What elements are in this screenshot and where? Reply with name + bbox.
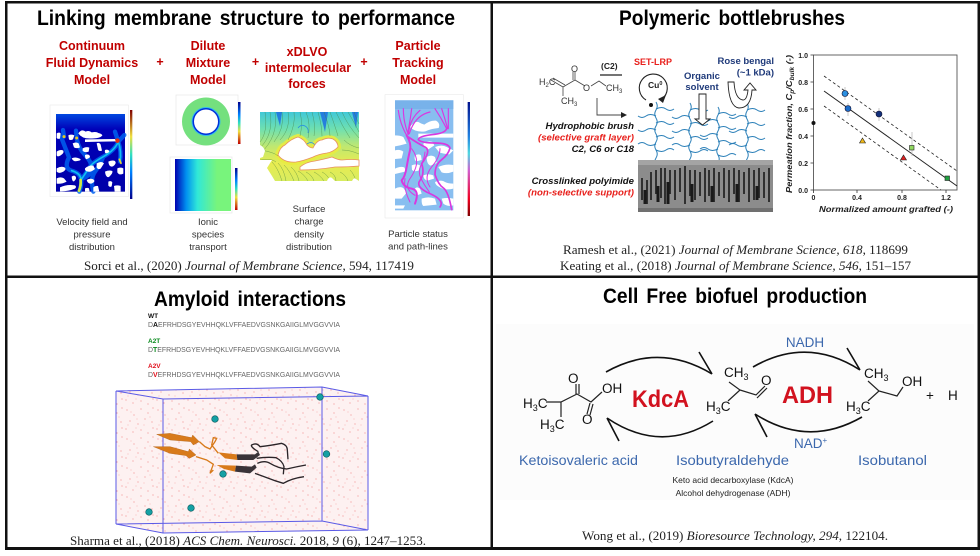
molecule: ketoisovaleric acid: OH [602, 381, 622, 396]
caption: surface charge: density [294, 229, 324, 240]
label: hydrophobic brush: C2, C6 or C18 [572, 144, 635, 155]
diagram: reaction pathway [519, 335, 958, 498]
molecule: isobutanol [846, 366, 922, 416]
heading: dilute mixture model: Dilute [191, 39, 225, 53]
molecule: ketoisovaleric acid: H [540, 417, 550, 432]
label: ketoisovaleric acid: Ketoisovaleric acid [519, 453, 638, 468]
diagram: monomer structure: C [549, 77, 556, 87]
heading: dilute mixture model: Mixture [186, 56, 230, 70]
panel: amyloid interactions [70, 288, 426, 548]
pore: strip [300, 157, 359, 170]
chart: permeation fraction vs normalized amount grafted: 0.8 [897, 195, 907, 202]
plus sign: + [252, 55, 259, 69]
chart: ionic species transport [170, 157, 238, 213]
label: rose bengal: Rose bengal [718, 56, 774, 67]
title: linking membrane structure: Linking membrane structure to performance [37, 7, 455, 30]
diagram: monomer structure [539, 61, 627, 118]
label: organic solvent: Organic [684, 71, 720, 82]
molecule: isobutanol: 3 [856, 406, 861, 416]
citation: Ramesh and Keating: Ramesh et al., (2021) Journal of Membrane Science, 618 , 118699 [563, 243, 908, 257]
pore: main blob [278, 137, 338, 162]
diagram: hydrophobic brush layer [638, 102, 765, 171]
citation: Sorci: Sorci et al., (2020) Journal of Membrane Science , 594, 117419 [84, 259, 414, 273]
molecule: ketoisovaleric acid: O [582, 412, 593, 427]
label: isobutanol: Isobutanol [858, 453, 927, 468]
diagram: molecular dynamics simulation box [116, 387, 368, 533]
molecule: isobutanol: C [861, 399, 871, 414]
molecule: isobutyraldehyde: O [761, 373, 772, 388]
molecule: isobutyraldehyde: 3 [744, 372, 749, 382]
molecule: isobutanol: OH [902, 374, 922, 389]
chart: permeation fraction vs normalized amount grafted [784, 53, 957, 214]
sequence: A2T [148, 338, 340, 354]
chart: particle tracking path-lines [385, 95, 470, 218]
sequence: WT: DAEFRHDSGYEVHHQKLVFFAEDVGSNKGAIIGLMVGGVVIA [148, 322, 340, 329]
molecule: isobutanol: H [846, 399, 856, 414]
citation: Sharma: Sharma et al., (2018) ACS Chem. Neurosci. 2018, 9 (6), 1247–1253. [70, 534, 426, 548]
caption: surface charge: distribution [286, 242, 332, 253]
label: organic solvent: solvent [685, 82, 719, 93]
molecule: ketoisovaleric acid: 3 [550, 424, 555, 434]
heading: xDLVO intermolecular forces: forces [288, 77, 326, 91]
icon: copper catalytic cycle: Cu [648, 80, 659, 90]
heading: xDLVO intermolecular forces: intermolecular [265, 61, 351, 75]
molecule: isobutanol: CH [864, 366, 884, 381]
heading: particle tracking model: Tracking [392, 56, 444, 70]
sequence: A2V [148, 363, 340, 379]
title: amyloid interactions: Amyloid interactions [154, 288, 346, 311]
diagram background [496, 324, 974, 500]
icon: solvent down arrow [695, 94, 710, 125]
label: ADH: ADH [782, 382, 833, 409]
caption: surface charge: Surface [293, 204, 325, 215]
label: NAD+: + [823, 436, 828, 445]
chart: permeation fraction vs normalized amount grafted: 0.4 [852, 195, 862, 202]
chart: permeation fraction vs normalized amount grafted: Normalized amount grafted (-) [819, 204, 953, 214]
chart: permeation fraction vs normalized amount grafted: /C [784, 79, 794, 91]
caption: velocity field: distribution [69, 242, 115, 253]
diagram: monomer structure: O [583, 83, 590, 93]
label: NAD+: NAD [794, 436, 823, 451]
heading: dilute mixture model: Model [190, 73, 226, 87]
chart: permeation fraction vs normalized amount grafted: 0.0 [798, 188, 808, 195]
chart: permeation fraction vs normalized amount grafted: (-) [784, 55, 794, 67]
icon: copper catalytic cycle [639, 74, 667, 107]
sequence: A2T: A2T [148, 338, 160, 345]
molecule: isobutyraldehyde: H [706, 399, 716, 414]
molecule: ketoisovaleric acid: C [538, 396, 548, 411]
molecule: isobutanol: 3 [884, 373, 889, 383]
chart: surface charge density streamlines [260, 112, 359, 181]
chart: permeation fraction vs normalized amount grafted: 0.6 [798, 107, 808, 114]
caption: velocity field: Velocity field and [56, 217, 128, 228]
diagram: monomer structure: CH [606, 83, 619, 93]
chart: permeation fraction vs normalized amount grafted: Permeation fraction, C [784, 102, 794, 193]
caption: particle status: and path-lines [388, 242, 448, 252]
chart: permeation fraction vs normalized amount grafted: p [790, 89, 796, 95]
molecule: ketoisovaleric acid: 3 [533, 403, 538, 413]
heading: particle tracking model: Model [400, 73, 436, 87]
chart: permeation fraction vs normalized amount grafted: 1.2 [941, 195, 951, 202]
chart: permeation fraction vs normalized amount grafted: 0.4 [798, 134, 808, 141]
citation: Wong: Wong et al., (2019) Bioresource Technology, 294 , 122104. [582, 529, 888, 543]
heading: continuum fluid dynamics model: Model [74, 73, 110, 87]
image: membrane cross-section [638, 160, 773, 212]
diagram: monomer structure: 3 [619, 89, 623, 95]
sequence: A2V: DVEFRHDSGYEVHHQKLVFFAEDVGSNKGAIIGLMVGGVVIA [148, 372, 340, 379]
caption: ionic species: Ionic [198, 217, 218, 228]
molecule: isobutyraldehyde: CH [724, 365, 744, 380]
diagram: monomer structure: O [571, 64, 578, 74]
chart: permeation fraction vs normalized amount grafted: 1.0 [798, 53, 808, 60]
chart: velocity field simulation [50, 105, 132, 199]
caption: particle status: Particle status [388, 229, 448, 240]
label: hydrophobic brush: (selective graft layer) [538, 132, 634, 144]
arrow: isobutanol to aldehyde [755, 414, 862, 437]
molecule: isobutyraldehyde: 3 [716, 406, 721, 416]
sequence: A2T: DTEFRHDSGYEVHHQKLVFFAEDVGSNKGAIIGLMVGGVVIA [148, 347, 340, 354]
heading: continuum fluid dynamics model: Continuum [59, 39, 125, 53]
icon: rose bengal rejection arrow [728, 82, 756, 108]
plus sign: + [156, 55, 164, 69]
molecule: ketoisovaleric acid: H [523, 396, 533, 411]
text: H: H [948, 388, 958, 403]
text: plus H: + [926, 388, 934, 403]
diagram: monomer structure: (C2) [601, 61, 618, 71]
chart: permeation fraction vs normalized amount grafted: 0 [812, 195, 816, 202]
panel: linking membrane structure to performance [37, 7, 470, 273]
panel: cell free biofuel production [496, 285, 974, 543]
chart: permeation fraction vs normalized amount grafted: 0.2 [798, 161, 808, 168]
label: hydrophobic brush: Hydrophobic brush [546, 121, 634, 132]
title: polymeric bottlebrushes: Polymeric bottlebrushes [619, 7, 845, 30]
sequence: A2V: A2V [148, 363, 161, 370]
caption: ionic species: species [192, 230, 224, 240]
heading: xDLVO intermolecular forces: xDLVO [287, 45, 328, 59]
molecule: ketoisovaleric acid: C [555, 417, 565, 432]
molecule: ketoisovaleric acid [523, 371, 622, 434]
legend: enzymes: Alcohol dehydrogenase (ADH) [676, 488, 791, 498]
diagram: monomer structure: H [539, 77, 546, 87]
plus sign: + [360, 55, 368, 69]
molecule: isobutyraldehyde: C [721, 399, 731, 414]
caption: velocity field: pressure [74, 230, 110, 240]
chart: permeation fraction vs normalized amount grafted: 0.8 [798, 80, 808, 87]
label: isobutyraldehyde: Isobutyraldehyde [676, 453, 789, 468]
protein: amyloid fibril ribbons [153, 433, 306, 483]
citation: Ramesh and Keating: Keating et al., (2018) Journal of Membrane Science, 546 , 151–157 [560, 259, 911, 273]
label: SET-LRP: SET-LRP [634, 57, 672, 67]
heading: particle tracking model: Particle [395, 39, 441, 53]
arrow: aldehyde to keto acid [607, 418, 713, 441]
label: NADH: NADH [786, 335, 824, 350]
label: crosslinked polyimide: Crosslinked polyimide [532, 176, 635, 187]
label: rose bengal: (~1 kDa) [737, 68, 774, 78]
caption: ionic species: transport [189, 242, 227, 253]
arrow: aldehyde to isobutanol [753, 348, 860, 370]
diagram: monomer structure: 3 [574, 102, 578, 108]
caption: surface charge: charge [294, 217, 324, 228]
diagram: monomer structure: CH [561, 96, 574, 106]
citation: Ramesh and Keating [560, 243, 911, 273]
sequence: WT: WT [148, 313, 158, 320]
chart: dilute mixture annulus [176, 95, 240, 146]
label: KdcA: KdcA [632, 386, 689, 413]
arrow: keto acid to aldehyde [606, 352, 712, 374]
icon: ions [146, 394, 330, 515]
legend: enzymes: Keto acid decarboxylase (KdcA) [673, 475, 794, 485]
chart: permeation fraction vs normalized amount grafted: bulk [790, 66, 796, 80]
panel: polymeric bottlebrushes [528, 7, 957, 273]
molecule: ketoisovaleric acid: O [568, 371, 579, 386]
sequence: WT [148, 313, 340, 329]
title: cell free biofuel production: Cell Free biofuel production [603, 285, 867, 308]
icon: copper catalytic cycle: 0 [659, 81, 662, 87]
label: crosslinked polyimide: (non-selective support) [528, 188, 634, 198]
heading: continuum fluid dynamics model: Fluid Dynamics [46, 56, 138, 70]
diagram: monomer structure: 2 [546, 83, 550, 89]
molecule: isobutyraldehyde [706, 365, 772, 416]
